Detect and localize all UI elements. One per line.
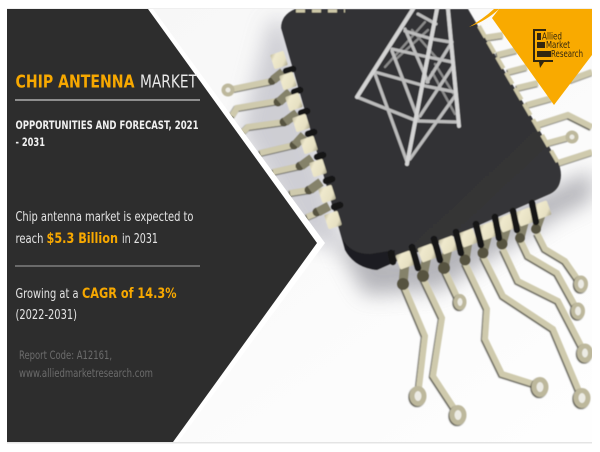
icon: antenna tower	[357, 9, 459, 164]
pin joints: left	[268, 77, 322, 216]
circuit pad: right	[568, 132, 576, 142]
white chevron border	[148, 9, 325, 442]
market size statement	[16, 210, 194, 247]
circuit traces: bottom	[403, 233, 585, 414]
CAGR statement: (2022-2031)	[16, 308, 77, 323]
logo badge	[469, 9, 592, 105]
CAGR statement: Growing at a	[16, 287, 78, 302]
circuit traces: left	[232, 81, 317, 217]
pin leads: bottom	[403, 212, 542, 284]
panel top edge shadow	[7, 8, 592, 9]
section divider	[15, 266, 200, 267]
logo text: Market	[546, 40, 570, 51]
pin blocks: left	[270, 51, 342, 229]
pins: top	[296, 10, 345, 12]
subtitle: - 2031	[16, 135, 45, 149]
icon: logo mark	[533, 29, 553, 68]
subtitle	[16, 118, 199, 149]
CAGR statement	[16, 286, 177, 323]
logo text: Research	[551, 49, 583, 60]
market size statement: $5.3 Billion	[46, 231, 118, 247]
pin separators: left	[286, 69, 340, 207]
logo text: Allied	[542, 32, 562, 42]
circuit pad: left	[224, 86, 232, 94]
soft shadow: left of chip	[240, 20, 345, 250]
title: MARKET	[140, 72, 198, 92]
panel edge shadow	[7, 442, 592, 444]
pins: right	[479, 26, 560, 166]
panel: dark text panel	[7, 9, 317, 442]
orange diamond	[492, 9, 592, 105]
circuit pads: bottom	[412, 278, 590, 422]
pin leads: left	[273, 72, 329, 212]
illustration: antenna chip	[224, 9, 592, 422]
title divider	[15, 100, 200, 101]
report code and website: Report Code: A12161,	[19, 348, 112, 362]
circuit traces: right	[483, 35, 592, 163]
soft shadow: below chip	[335, 170, 592, 295]
report code and website: www.alliedmarketresearch.com	[19, 366, 153, 380]
pin blocks: bottom	[395, 200, 552, 270]
tower legs	[357, 9, 459, 164]
title: CHIP ANTENNA	[16, 72, 135, 92]
market size statement: reach	[16, 232, 44, 247]
chip lower-left side	[342, 238, 395, 270]
CAGR statement: CAGR of 14.3%	[82, 286, 177, 302]
market size statement: Chip antenna market is expected to	[16, 210, 194, 225]
logo text	[542, 32, 583, 60]
pin joints: bottom	[397, 224, 541, 290]
pin separators: bottom	[391, 203, 536, 268]
market size statement: in 2031	[122, 232, 158, 247]
tower cross braces	[357, 14, 458, 162]
chip body	[281, 9, 561, 270]
orange swoosh	[469, 9, 499, 27]
subtitle: OPPORTUNITIES AND FORECAST, 2021	[16, 118, 199, 132]
tower rear struts	[385, 22, 455, 114]
report code and website	[19, 348, 153, 380]
